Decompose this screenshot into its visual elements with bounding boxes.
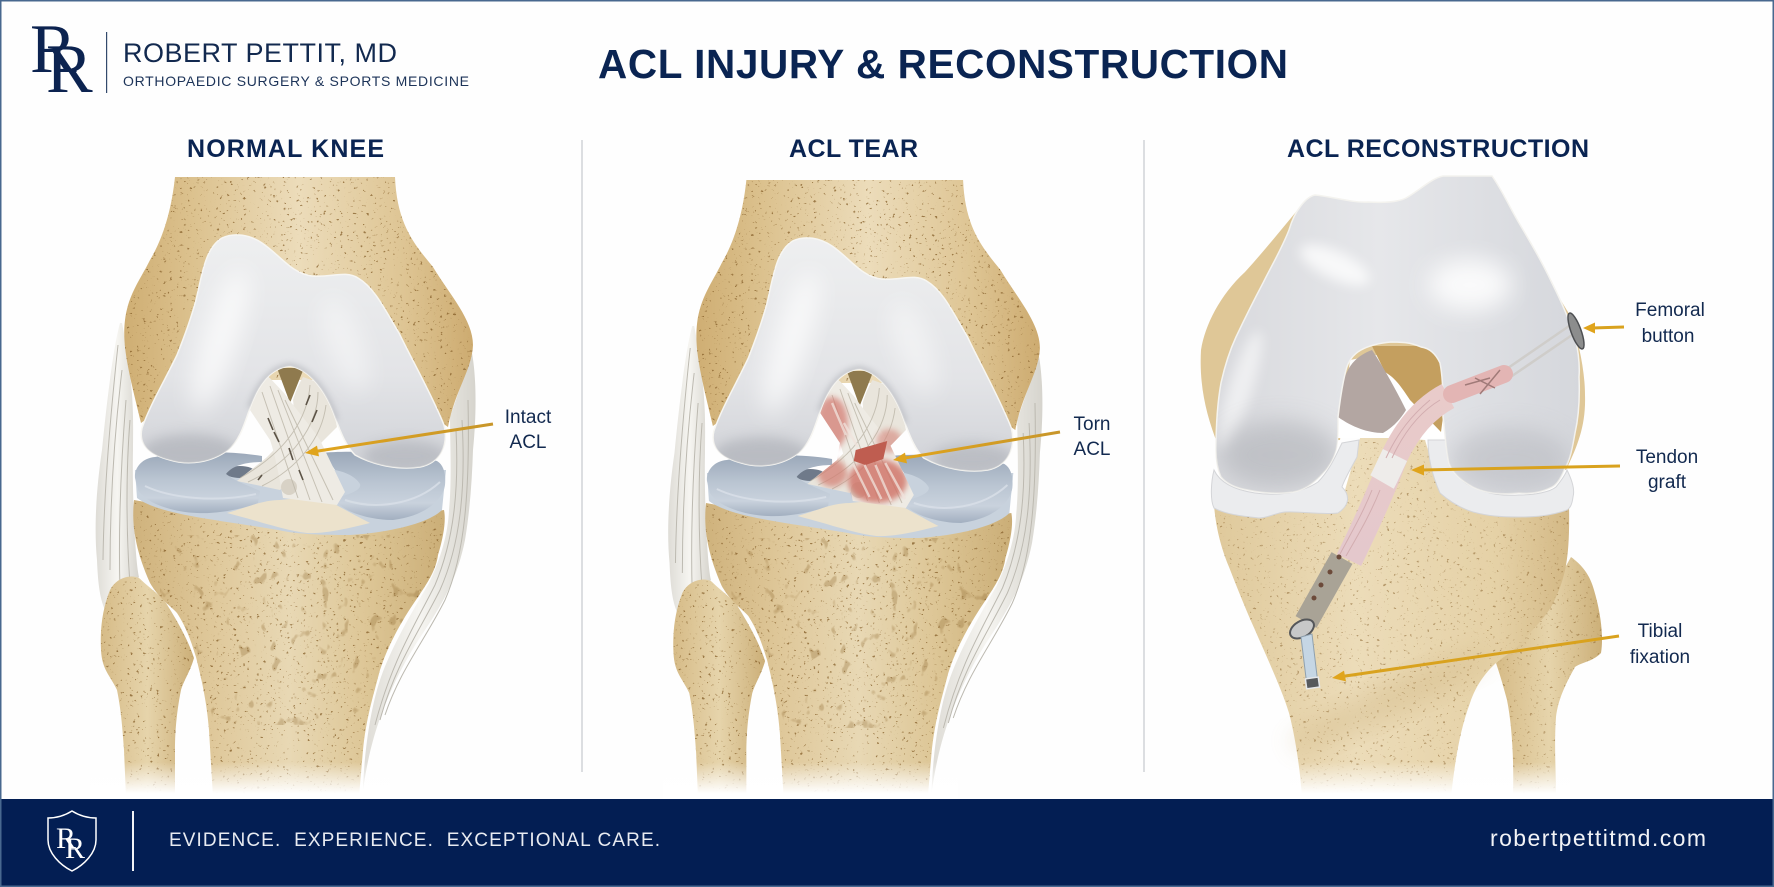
tibial plateau surface [798,502,938,536]
logo: RR monogram and doctor name [30,11,469,108]
tibia bone [1210,435,1575,797]
footer band [0,799,1774,887]
icon: shield logo [48,811,96,871]
title: ACL INJURY & RECONSTRUCTION [598,41,1288,87]
callout: torn ACL [893,414,1110,463]
meniscal recess [225,466,255,478]
fibula bone [673,580,765,792]
femoral button and suture [1508,311,1587,376]
notch shadow [847,371,873,406]
arrow [893,432,1060,463]
heading: normal knee: NORMAL KNEE [187,135,384,163]
intact ACL [237,376,345,505]
label text: ACL [510,432,546,453]
heading: ACL reconstruction: ACL RECONSTRUCTION [1287,135,1589,163]
tibia bone [702,503,1017,800]
fibula bone [100,576,194,792]
panel: ACL tear illustration [663,178,1047,800]
right ligament [363,353,476,790]
right meniscus [889,455,1013,523]
panel: ACL reconstruction illustration [1201,176,1605,799]
label text: ACL [1074,439,1110,460]
label text: Tibial [1638,621,1682,642]
icon: shield logo: R [65,832,85,865]
callout: intact ACL [305,407,552,456]
tibia bone [130,500,450,797]
tagline: EVIDENCE. EXPERIENCE. EXCEPTIONAL CARE. [169,830,660,851]
arrow [1411,464,1620,476]
left ligament [668,326,711,615]
label text: Torn [1074,414,1110,435]
notch with PCL [1338,346,1446,438]
panel: normal knee illustration [90,177,480,799]
meniscal recess [796,469,825,481]
label text: button [1642,326,1694,347]
femur bone [1201,200,1585,470]
ligament fibres [675,348,1035,728]
right meniscus [1428,440,1574,517]
tibial fixation sheath and screw [1287,554,1342,689]
label text: fixation [1630,647,1690,668]
left ligament [96,323,139,612]
logo monogram [30,11,93,108]
specialty tagline: ORTHOPAEDIC SURGERY & SPORTS MEDICINE [123,73,469,89]
left meniscus [1211,440,1359,518]
label text: Tendon [1636,447,1698,468]
callout: femoral button [1583,300,1705,347]
ligament fibres [103,345,468,725]
left meniscus [135,452,262,513]
meniscus rims [717,485,1007,508]
arrow [1332,636,1619,681]
notch shadow [277,368,304,403]
femur bone [120,177,480,432]
doctor name: ROBERT PETTIT, MD [123,38,397,68]
cartilage [713,238,1014,475]
callout: tibial fixation [1332,621,1690,681]
label text: Femoral [1635,300,1705,321]
tibial plateau surface [227,498,370,533]
arrow [305,424,493,456]
bottom fade [1290,762,1570,799]
meniscus rims [145,482,440,505]
right ligament [932,356,1042,793]
website: robertpettitmd.com [1490,825,1706,851]
heading: ACL tear: ACL TEAR [789,135,918,163]
torn ACL [807,379,914,508]
logo monogram: R [46,31,93,108]
cartilage [141,235,447,472]
icon: shield logo: R [56,822,76,855]
label text: Intact [505,407,552,428]
callout: tendon graft [1411,447,1698,493]
femur bone [692,178,1047,433]
bottom fade [663,762,958,799]
tibial plateau rim [135,470,446,535]
arrow [1583,322,1624,334]
femoral cartilage [1209,176,1579,494]
tibial plateau rim [707,473,1013,538]
right meniscus [320,452,445,520]
tendon graft [1340,370,1504,560]
logo monogram: R [30,11,77,88]
label text: graft [1648,472,1687,493]
fibula bone [1496,557,1602,791]
bottom fade [90,762,390,799]
left meniscus [707,455,832,516]
